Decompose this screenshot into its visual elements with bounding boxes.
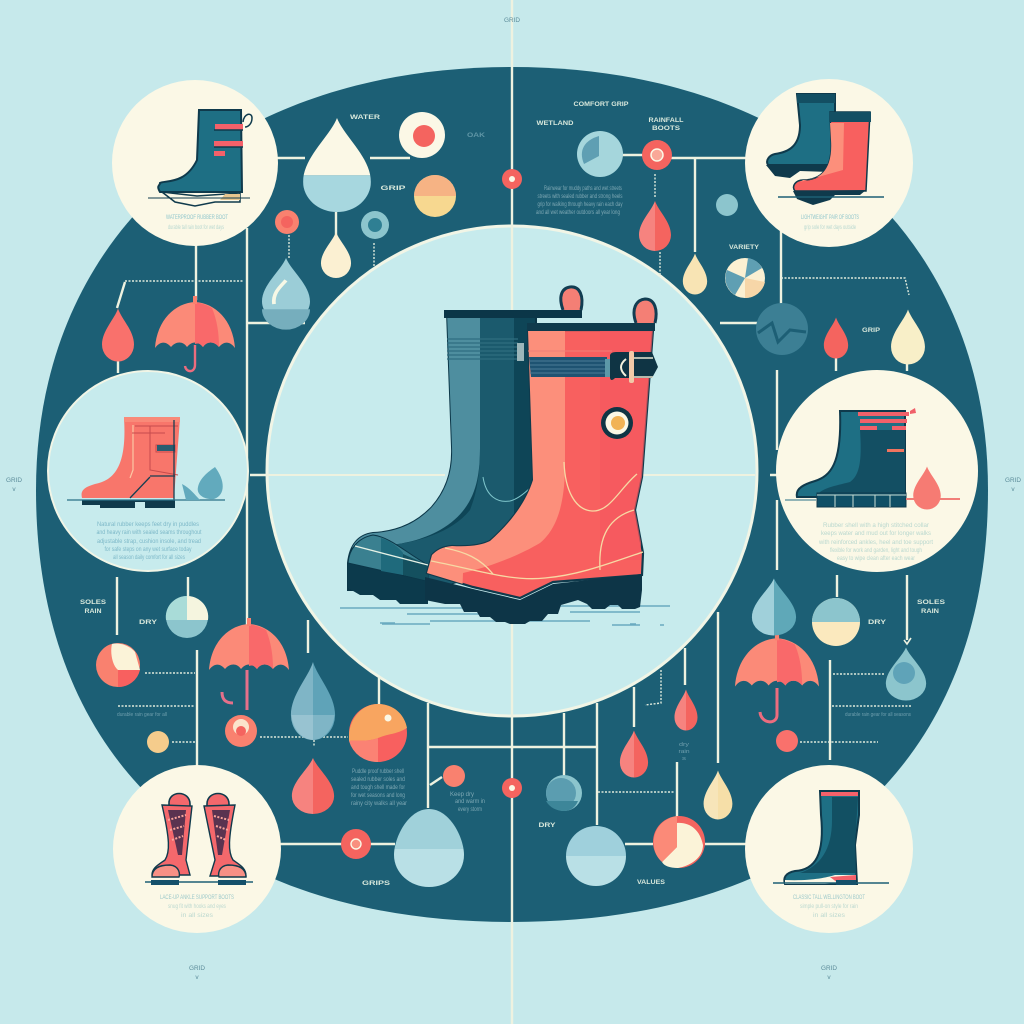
medallion: top right boots bbox=[745, 79, 913, 247]
icon: coral drop bbox=[292, 758, 334, 814]
icon: top centre node bbox=[502, 169, 522, 189]
text block: side notes: dry bbox=[679, 742, 689, 748]
icon: cream drop bbox=[891, 310, 925, 364]
text block: lower centre: Keep dry bbox=[450, 792, 474, 798]
icon: cream drop bbox=[321, 232, 351, 278]
icon: glass drop bbox=[262, 258, 310, 330]
icon: blue ring bbox=[361, 211, 389, 239]
text block: lower left bbox=[351, 769, 407, 807]
icon: blue drop bbox=[752, 578, 796, 636]
text block: lower centre bbox=[450, 792, 485, 813]
buckle strap bbox=[529, 351, 658, 383]
text block: side notes: rain bbox=[678, 749, 690, 755]
boot pair: main illustration bbox=[340, 287, 670, 625]
icon: orange sphere bbox=[349, 704, 407, 762]
small labels: OAK bbox=[467, 132, 485, 139]
icon: umbrella top left bbox=[155, 296, 235, 371]
paragraph: keeps water and mud out for longer walks bbox=[821, 531, 931, 537]
small labels bbox=[80, 101, 946, 887]
icon: coral drop bbox=[674, 690, 698, 730]
icon: coral short boot bbox=[67, 417, 225, 508]
text block: side notes: durable rain gear for all seasons bbox=[845, 712, 911, 718]
icon: coral drop bbox=[620, 730, 648, 778]
caption: in all sizes bbox=[813, 913, 845, 919]
icon: blue drop bbox=[291, 662, 335, 740]
icon: pale circle bbox=[566, 826, 626, 886]
icon: zigzag circle bbox=[756, 303, 808, 355]
icon: drop with inner circle bbox=[886, 648, 926, 700]
icon: small coral node bbox=[443, 765, 465, 787]
small labels: COMFORT GRIP bbox=[574, 101, 629, 108]
small labels: GRIPS bbox=[362, 880, 391, 887]
icon: coral dot bbox=[776, 730, 798, 752]
central circle bbox=[267, 226, 757, 716]
paragraph: and heavy rain with sealed seams throughout bbox=[96, 530, 202, 536]
caption: LIGHTWEIGHT PAIR OF BOOTS bbox=[801, 214, 859, 221]
text block: top centre: and all wet weather outdoors all year long bbox=[536, 210, 620, 216]
icon: small orange dot bbox=[147, 731, 169, 753]
paragraph: flexible for work and garden, light and tough bbox=[830, 548, 922, 554]
small labels: RAIN bbox=[84, 608, 102, 615]
text block: top centre: Rainwear for muddy paths and wet streets bbox=[544, 186, 622, 192]
caption bbox=[801, 214, 859, 231]
icon: half filled drop bbox=[303, 118, 371, 212]
icon: coral drop bbox=[913, 466, 941, 510]
outer labels: v bbox=[1011, 486, 1015, 493]
caption: CLASSIC TALL WELLINGTON BOOT bbox=[793, 895, 865, 901]
text block: top centre bbox=[536, 186, 622, 216]
caption: WATERPROOF RUBBER BOOT bbox=[166, 214, 228, 221]
paragraph: Rubber shell with a high stitched collar bbox=[823, 523, 929, 529]
text block: lower centre: and warm in bbox=[455, 799, 485, 805]
icon: small blue circle bbox=[716, 194, 738, 216]
medallion: left boot bbox=[48, 371, 248, 571]
dark boot sole bbox=[348, 563, 428, 604]
text block: lower left: sealed rubber soles and bbox=[351, 777, 405, 783]
icon: top pie bbox=[577, 131, 623, 177]
paragraph bbox=[818, 523, 933, 562]
text block: side notes bbox=[117, 712, 911, 762]
small labels: SOLES bbox=[80, 599, 107, 606]
small labels: VALUES bbox=[637, 879, 666, 886]
caption: grip sole for wet days outside bbox=[804, 224, 856, 231]
medallion: bottom left boots bbox=[113, 765, 281, 933]
small labels: WETLAND bbox=[536, 120, 574, 127]
icon: coral node bbox=[642, 140, 672, 170]
small labels: RAIN bbox=[921, 608, 939, 615]
icon: coral drop bbox=[102, 308, 134, 362]
icon: laced boots bbox=[145, 794, 253, 885]
small labels: DRY bbox=[139, 619, 158, 626]
icon: coral drop bbox=[824, 318, 848, 358]
pull loops bbox=[561, 287, 582, 310]
icon: teal boot bbox=[148, 110, 252, 206]
icon: cream drop bbox=[683, 254, 707, 294]
text block: lower centre: every storm bbox=[458, 807, 482, 813]
icon: teal boots and drop bbox=[785, 408, 960, 510]
paragraph: all season daily comfort for all sizes bbox=[113, 555, 185, 561]
coral boot bbox=[420, 287, 658, 624]
sole bbox=[425, 574, 642, 624]
text block: lower left: for wet seasons and long bbox=[351, 793, 405, 799]
icon: coral dot bbox=[275, 210, 299, 234]
connector lines bbox=[117, 0, 911, 1024]
outer labels: v bbox=[195, 974, 199, 981]
dark boot bbox=[340, 310, 582, 604]
outer labels: GRID bbox=[6, 477, 22, 484]
icon: lower centre node bbox=[502, 778, 522, 798]
text block: side notes: durable rain gear for all bbox=[117, 712, 167, 718]
dark boot toe cap bbox=[348, 535, 428, 581]
small labels: GRIP bbox=[380, 185, 407, 192]
caption bbox=[793, 895, 865, 919]
paragraph: Natural rubber keeps feet dry in puddles bbox=[97, 522, 199, 528]
dotted leader lines bbox=[118, 174, 912, 792]
icon: coral cream gauge bbox=[653, 816, 705, 868]
outer labels: GRID bbox=[189, 965, 205, 972]
water ripples bbox=[340, 606, 670, 625]
caption bbox=[160, 895, 234, 919]
outer labels: GRID bbox=[821, 965, 837, 972]
icon: coral cream pie bbox=[96, 643, 140, 687]
text block: lower left: rainy city walks all year bbox=[351, 801, 407, 807]
icon: pale drop bbox=[394, 809, 464, 887]
caption: snug fit with hooks and eyes bbox=[168, 904, 226, 910]
medallion: bottom right boot bbox=[745, 765, 913, 933]
icon: half circle bbox=[166, 596, 208, 638]
icon: coral target bbox=[399, 112, 445, 158]
outer labels: GRID bbox=[504, 17, 520, 24]
paragraph: for safe steps on any wet surface today bbox=[104, 547, 192, 553]
text block: top centre: grip for walking through heavy rain each day bbox=[538, 202, 622, 208]
caption: in all sizes bbox=[181, 913, 213, 919]
paragraph: easy to wipe clean after each wear bbox=[837, 556, 915, 562]
icon: cream drop bbox=[704, 770, 732, 820]
paragraph: adjustable strap, cushion insole, and tread bbox=[97, 539, 201, 545]
text block: top centre: streets with sealed rubber and strong heels bbox=[538, 194, 622, 200]
icon: blue half circle bbox=[546, 775, 582, 811]
rivet bbox=[601, 407, 633, 439]
small labels: DRY bbox=[538, 822, 556, 829]
small labels: BOOTS bbox=[652, 125, 681, 132]
icon: coral node bbox=[341, 829, 371, 859]
text block: lower left: and tough shell made for bbox=[351, 785, 405, 791]
outer labels: v bbox=[827, 974, 831, 981]
icon: boots pair bbox=[766, 94, 884, 205]
text block: side notes: s bbox=[682, 756, 686, 762]
small labels: VARIETY bbox=[729, 244, 760, 251]
small labels: DRY bbox=[868, 619, 887, 626]
small labels: WATER bbox=[350, 114, 380, 121]
caption bbox=[166, 214, 228, 231]
small labels: RAINFALL bbox=[648, 117, 684, 124]
paragraph: with reinforced ankles, heel and toe support bbox=[818, 540, 933, 546]
seams bbox=[431, 462, 643, 579]
icon: coral drop bbox=[639, 201, 671, 251]
icon: blue leaf drop bbox=[182, 467, 223, 500]
outer labels: GRID bbox=[1005, 477, 1021, 484]
paragraph bbox=[96, 522, 202, 561]
icon: mixed pie bbox=[725, 258, 765, 298]
text block: lower left: Puddle proof rubber shell bbox=[352, 769, 404, 775]
icon: orange half circle bbox=[414, 175, 456, 217]
icon: umbrella right bbox=[735, 632, 819, 722]
medallion: right boots bbox=[776, 370, 978, 572]
icon: coral ring bbox=[225, 715, 257, 747]
icon: blue cream circle bbox=[812, 598, 860, 646]
small labels: SOLES bbox=[917, 599, 946, 606]
caption: simple pull-on style for rain bbox=[800, 904, 858, 910]
icon: tall teal boot bbox=[773, 791, 889, 885]
icon: umbrella lower left bbox=[209, 618, 289, 710]
medallion: top left boot bbox=[112, 80, 278, 246]
ring panel bbox=[36, 67, 988, 922]
outer labels: v bbox=[12, 486, 16, 493]
caption: LACE-UP ANKLE SUPPORT BOOTS bbox=[160, 895, 234, 901]
caption: durable tall rain boot for wet days bbox=[168, 224, 224, 231]
small labels: GRIP bbox=[862, 327, 881, 334]
